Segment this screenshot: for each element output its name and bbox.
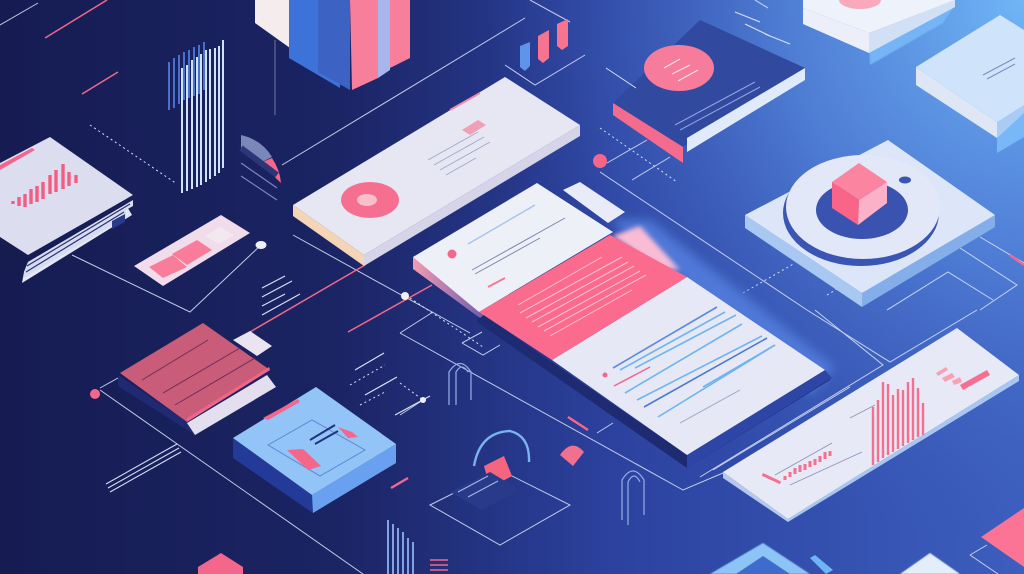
top sheet — [413, 257, 487, 318]
icon: white node — [401, 292, 409, 300]
panel: small white tag — [563, 182, 625, 223]
icon: pink half dome — [560, 446, 584, 466]
panel: main report document — [413, 183, 835, 468]
mini pink chart — [13, 164, 76, 207]
panel: platform with disc and cube — [745, 140, 995, 307]
chart: striped tower — [169, 40, 223, 193]
soft pink glow at band corner — [612, 226, 680, 270]
pink header band — [479, 235, 687, 360]
dotted lines — [90, 125, 842, 405]
bar: bottom stripes — [388, 520, 448, 574]
panel: blue square card — [233, 387, 396, 513]
icon: glass tubes — [449, 364, 644, 525]
icon: pie wedge — [241, 135, 281, 200]
panel: bottom corner shapes — [198, 508, 1024, 574]
panel: red book — [90, 323, 276, 435]
panel: right report with chart — [723, 328, 1019, 522]
panel: top card with pink disc — [606, 20, 805, 163]
panel: stacked booklet left — [0, 137, 133, 283]
panel: top right cards — [803, 0, 1024, 153]
hatch lines — [106, 444, 181, 492]
document text lines — [428, 93, 490, 175]
icon: white node lower — [420, 397, 426, 403]
card: small pink ticket — [134, 215, 266, 286]
small caption marks — [262, 0, 790, 415]
icon: hologram arch — [450, 431, 529, 510]
blue text lines — [613, 307, 775, 417]
panel: top bar chart — [255, 0, 410, 90]
icon: pink node — [593, 154, 607, 168]
panel: long document with circle — [293, 77, 580, 266]
chart: small 3D bars — [520, 19, 568, 71]
